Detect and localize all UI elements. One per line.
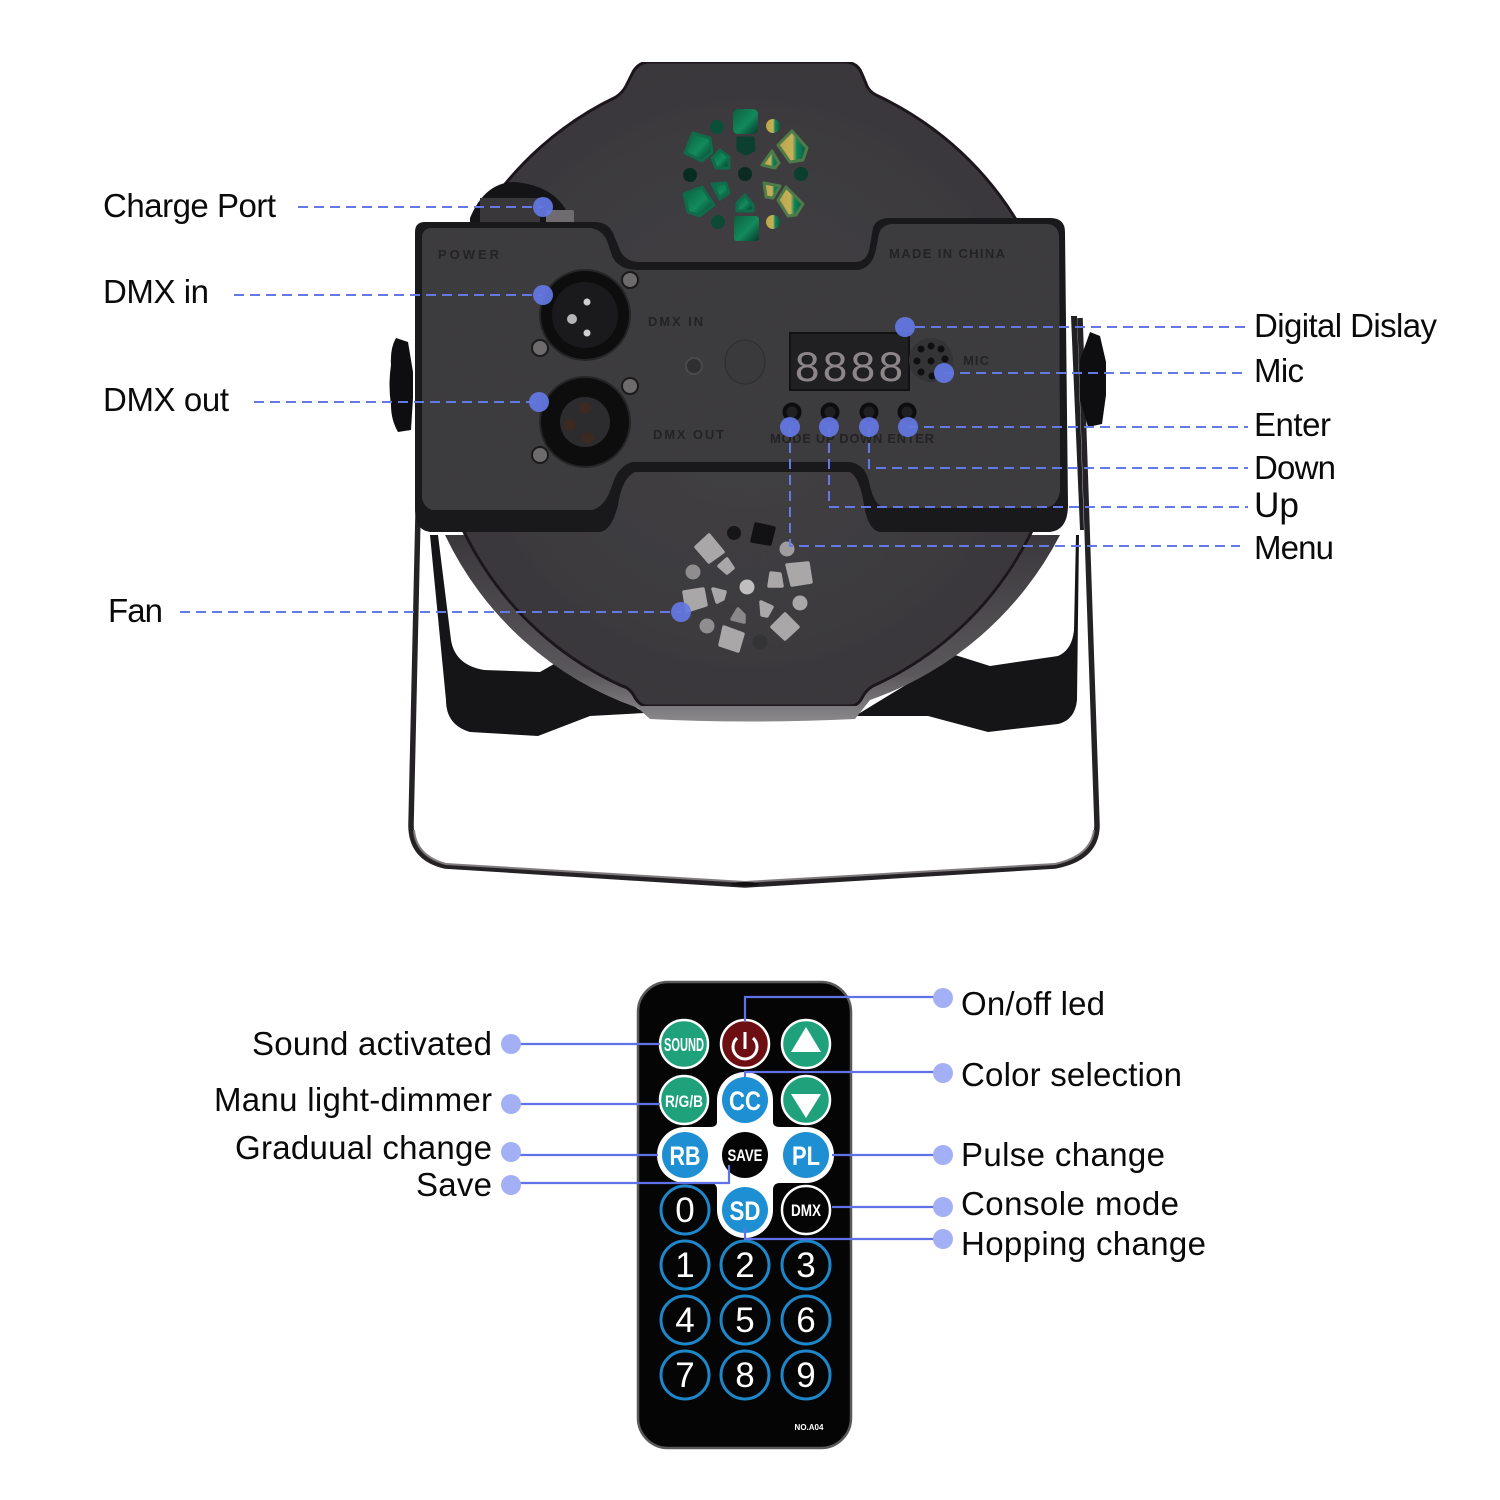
number keys 1 to 9: 7 bbox=[675, 1356, 695, 1395]
button: SAVE: SAVE bbox=[728, 1146, 762, 1165]
button: PL: PL bbox=[792, 1141, 820, 1171]
callout: DMX in: DMX in bbox=[103, 273, 209, 310]
callout: Hopping change bbox=[745, 1225, 1206, 1262]
DMX in connector bbox=[532, 270, 638, 360]
button: arrow down bbox=[782, 1076, 830, 1124]
callout: Up bbox=[819, 417, 1299, 525]
control box face bbox=[422, 224, 1060, 510]
callout: Fan: Fan bbox=[108, 592, 163, 629]
button: SAVE bbox=[722, 1132, 768, 1178]
remote body bbox=[638, 982, 851, 1448]
callout: Digital Dislay: Digital Dislay bbox=[1254, 307, 1438, 344]
right mounting knob bbox=[1080, 332, 1106, 427]
callout: Sound activated bbox=[252, 1025, 660, 1062]
button: SD: SD bbox=[730, 1196, 760, 1226]
callout: Manu light-dimmer bbox=[214, 1081, 660, 1118]
callout: Save bbox=[416, 1165, 729, 1203]
embossed text: DMX OUT: DMX OUT bbox=[653, 427, 725, 442]
bottom vent with grey LEDs visible bbox=[684, 524, 811, 651]
callout: Enter bbox=[898, 406, 1331, 443]
button: PL bbox=[783, 1132, 829, 1178]
button: SOUND bbox=[660, 1020, 708, 1068]
button: power bbox=[721, 1020, 769, 1068]
indicator and blank round cover bbox=[686, 340, 765, 384]
callout: Color selection: Color selection bbox=[961, 1056, 1182, 1093]
microphone grille bbox=[909, 338, 953, 382]
callout: Graduual change: Graduual change bbox=[235, 1129, 492, 1166]
housing outer rim bbox=[445, 535, 1060, 722]
top vent with green LEDs visible bbox=[683, 109, 808, 241]
number keys 1 to 9: 4 bbox=[675, 1301, 695, 1340]
embossed text: DMX IN: DMX IN bbox=[648, 314, 704, 329]
number keys 1 to 9: 9 bbox=[796, 1356, 816, 1395]
callout: Mic: Mic bbox=[1254, 352, 1304, 389]
callout: Color selection bbox=[745, 1056, 1182, 1093]
number keys 1 to 9: 5 bbox=[735, 1301, 755, 1340]
button: DMX bbox=[782, 1186, 830, 1234]
button: SOUND: SOUND bbox=[664, 1035, 704, 1055]
button: arrow up bbox=[782, 1020, 830, 1068]
callout: Console mode: Console mode bbox=[961, 1185, 1179, 1222]
left mounting knob bbox=[390, 338, 413, 432]
model number: NO.A04 bbox=[795, 1423, 824, 1432]
callout: DMX in bbox=[103, 273, 553, 310]
button: CC bbox=[722, 1077, 768, 1123]
callout: Fan bbox=[108, 592, 691, 629]
embossed text: MIC: MIC bbox=[963, 353, 990, 368]
right bracket strut bbox=[1071, 316, 1084, 530]
callout: DMX out bbox=[103, 381, 549, 418]
product: stage light rear view bbox=[390, 62, 1106, 886]
callout: Sound activated: Sound activated bbox=[252, 1025, 492, 1062]
number keys 1 to 9: 1 bbox=[675, 1246, 695, 1285]
white cross panel bbox=[657, 1072, 834, 1238]
button: DMX: DMX bbox=[791, 1201, 822, 1220]
button: 0 bbox=[661, 1186, 709, 1234]
embossed text: button names: MODE UP DOWN ENTER bbox=[770, 431, 935, 446]
button: CC: CC bbox=[729, 1086, 761, 1116]
callout: Menu bbox=[780, 417, 1334, 566]
button: 0: 0 bbox=[675, 1191, 695, 1230]
callout: Save: Save bbox=[416, 1166, 492, 1203]
number keys 1 to 9: 6 bbox=[796, 1301, 816, 1340]
number keys 1 to 9: 2 bbox=[735, 1246, 755, 1285]
product: remote control bbox=[638, 982, 851, 1448]
button: R/G/B: R/G/B bbox=[665, 1092, 703, 1111]
button: SD bbox=[722, 1187, 768, 1233]
right bracket arm and foot bbox=[855, 535, 1079, 732]
button: R/G/B bbox=[660, 1076, 708, 1124]
callout: On/off led bbox=[745, 985, 1105, 1022]
number keys 1 to 9: 8 bbox=[735, 1356, 755, 1395]
control buttons bbox=[784, 404, 914, 420]
callout: Mic bbox=[934, 352, 1304, 389]
callout: On/off led: On/off led bbox=[961, 985, 1105, 1022]
left bracket arm and foot bbox=[430, 535, 645, 736]
button: RB: RB bbox=[670, 1141, 700, 1171]
callout: Charge Port: Charge Port bbox=[103, 187, 276, 224]
callout: Menu: Menu bbox=[1254, 529, 1334, 566]
charge port cable bbox=[470, 182, 574, 224]
callout: Pulse change: Pulse change bbox=[961, 1136, 1165, 1173]
callout: Console mode bbox=[832, 1185, 1179, 1222]
callout: Enter: Enter bbox=[1254, 406, 1331, 443]
callout: Up: Up bbox=[1254, 486, 1299, 525]
number keys 1 to 9 bbox=[661, 1241, 830, 1399]
callout: Down bbox=[859, 417, 1336, 486]
callout: DMX out: DMX out bbox=[103, 381, 229, 418]
digital display: 8888 bbox=[794, 345, 904, 395]
embossed text: MADE IN CHINA: MADE IN CHINA bbox=[889, 246, 1006, 261]
DMX out connector bbox=[532, 377, 638, 467]
callout: Digital Dislay bbox=[895, 307, 1438, 344]
mounting bracket hoop bbox=[411, 318, 1097, 886]
control box shadow base bbox=[415, 218, 1068, 532]
callout: Hopping change: Hopping change bbox=[961, 1225, 1206, 1262]
callout: Graduual change bbox=[235, 1129, 658, 1166]
callout: Manu light-dimmer: Manu light-dimmer bbox=[214, 1081, 492, 1118]
housing back plate bbox=[431, 62, 1064, 706]
callout: Pulse change bbox=[832, 1136, 1165, 1173]
button: RB bbox=[662, 1132, 708, 1178]
number keys 1 to 9: 3 bbox=[796, 1246, 816, 1285]
callout: Down: Down bbox=[1254, 449, 1336, 486]
embossed text: POWER: POWER bbox=[438, 247, 500, 262]
callout: Charge Port bbox=[103, 187, 553, 224]
